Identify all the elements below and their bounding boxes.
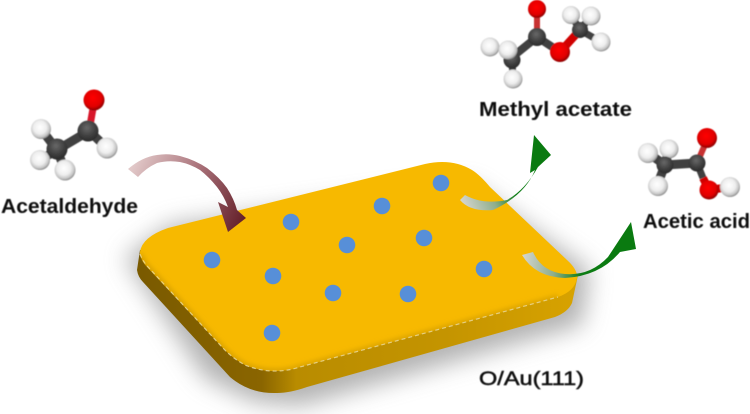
label: Acetic acid: Acetic acid [643,211,750,233]
label: Methyl acetate: Methyl acetate [479,99,632,121]
slab side face [137,250,578,393]
molecule: acetic acid [638,128,740,200]
slab bevel [140,254,558,371]
slab shadow [125,185,590,406]
label: Acetaldehyde: Acetaldehyde [1,196,138,218]
label: O/Au(111): O/Au(111) [479,368,584,390]
arrow: to methyl acetate [460,135,551,210]
molecule: methyl acetate [480,0,610,88]
blue dots [204,175,492,341]
slab top face [140,162,577,371]
gold slab [137,162,578,393]
molecule: acetaldehyde [30,90,118,180]
arrow: acetaldehyde to surface [128,154,246,232]
stitched edge [140,254,558,371]
arrow: to acetic acid [522,222,636,278]
